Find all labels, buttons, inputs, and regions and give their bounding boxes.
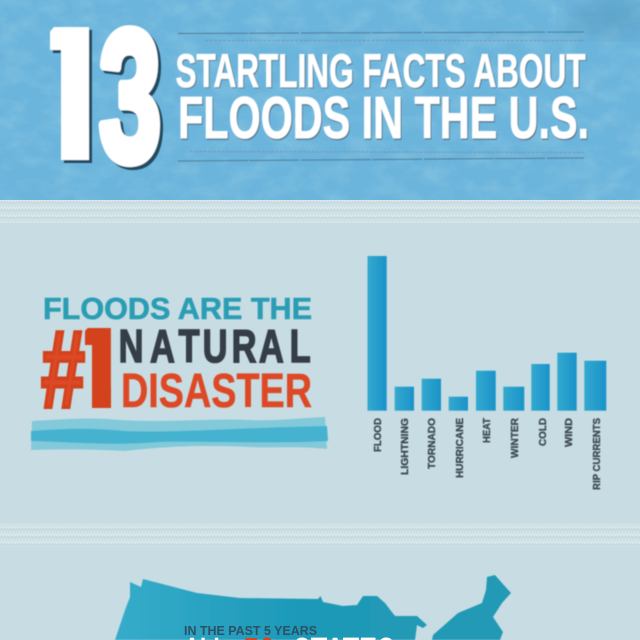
big #1: # bbox=[41, 308, 85, 431]
bar labels: COLD bbox=[537, 418, 549, 446]
map: northeastern states bbox=[432, 575, 511, 640]
bars bbox=[368, 256, 606, 411]
bar chart: deaths by disaster bbox=[368, 256, 606, 490]
bar labels: HURRICANE bbox=[454, 418, 466, 478]
big #1 bbox=[40, 327, 112, 410]
water wave strip bbox=[31, 417, 328, 451]
bar labels: WIND bbox=[563, 418, 575, 447]
word natural: NATURAL bbox=[119, 320, 311, 372]
callout lead-in: IN THE PAST 5 YEARS bbox=[184, 623, 317, 638]
big number 13 bbox=[49, 24, 164, 171]
heading: number one natural disaster bbox=[40, 296, 312, 410]
map: western and central states bbox=[115, 579, 427, 640]
wave pattern band top bbox=[0, 200, 640, 223]
bar labels bbox=[372, 417, 603, 490]
map: United States bbox=[115, 575, 511, 640]
callout headline, cropped by the frame as in the reference bbox=[190, 637, 392, 640]
panel: header banner bbox=[0, 0, 640, 204]
wave pattern band bottom bbox=[0, 522, 640, 547]
bar labels: HEAT bbox=[481, 417, 493, 443]
big number 13: 3 bbox=[102, 0, 164, 203]
bar labels: TORNADO bbox=[426, 418, 438, 469]
word disaster: DISASTER bbox=[121, 365, 312, 418]
heading line: floods are the: FLOODS ARE THE bbox=[43, 292, 312, 326]
bar labels: FLOOD bbox=[372, 418, 384, 452]
dashed rules above and below title bbox=[178, 32, 584, 161]
big #1: 1 bbox=[80, 306, 117, 432]
bar labels: LIGHTNING bbox=[399, 418, 411, 475]
bar labels: WINTER bbox=[509, 418, 521, 458]
bar labels: RIP CURRENTS bbox=[591, 418, 603, 490]
callout: past 5 years bbox=[184, 626, 392, 640]
